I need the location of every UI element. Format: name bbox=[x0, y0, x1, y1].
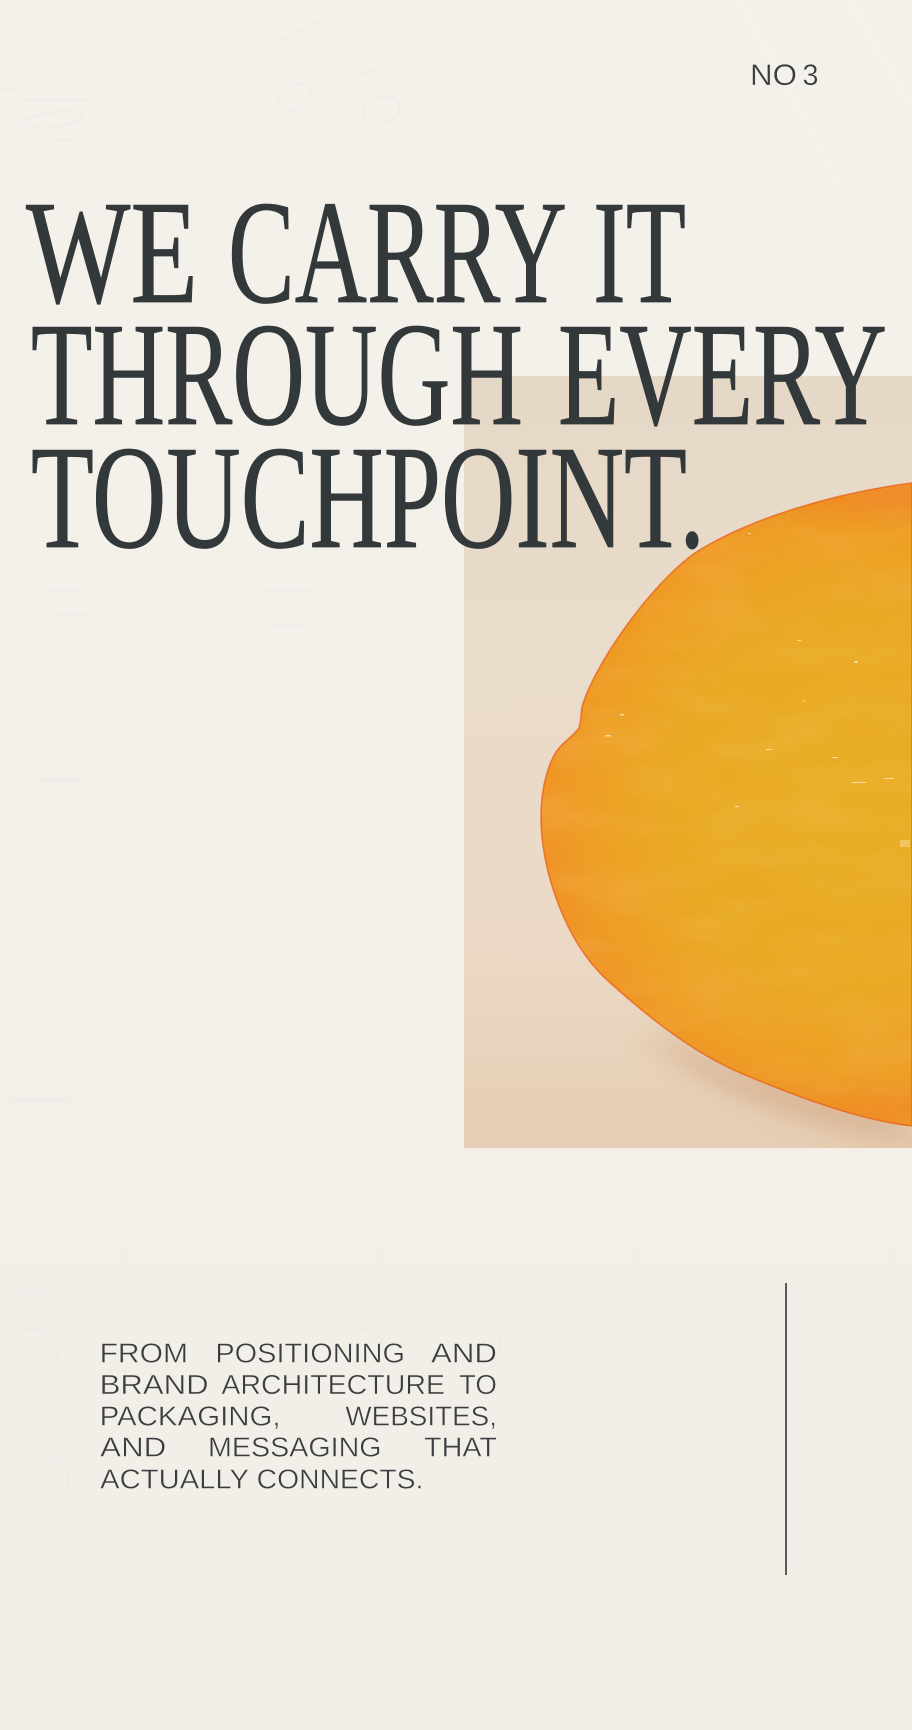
body text: FROM bbox=[100, 1338, 188, 1369]
image panel: mango slice on tan backdrop bbox=[464, 376, 912, 1148]
issue number: NO bbox=[750, 59, 797, 92]
mango slice bbox=[530, 470, 912, 1140]
title bbox=[26, 171, 887, 580]
title: THROUGH bbox=[31, 293, 523, 457]
body text: AND bbox=[100, 1432, 166, 1463]
body text: CONNECTS. bbox=[257, 1463, 423, 1494]
vertical rule bbox=[785, 1283, 787, 1575]
body text: POSITIONING bbox=[215, 1338, 405, 1369]
issue number: 3 bbox=[802, 59, 818, 92]
title: CARRY bbox=[228, 171, 567, 335]
body text: BRAND bbox=[100, 1369, 209, 1400]
body text: TO bbox=[459, 1369, 497, 1400]
body text: WEBSITES, bbox=[345, 1400, 497, 1431]
issue number bbox=[750, 59, 818, 92]
mango shadow bbox=[640, 1030, 912, 1138]
body text: THAT bbox=[424, 1432, 497, 1463]
body text: AND bbox=[431, 1338, 497, 1369]
title: IT bbox=[593, 171, 686, 335]
body text: PACKAGING, bbox=[100, 1400, 281, 1431]
body text: MESSAGING bbox=[208, 1432, 382, 1463]
body text: ARCHITECTURE bbox=[221, 1369, 445, 1400]
body text: ACTUALLY bbox=[100, 1463, 249, 1494]
body text bbox=[100, 1338, 497, 1494]
title: WE bbox=[26, 171, 198, 335]
